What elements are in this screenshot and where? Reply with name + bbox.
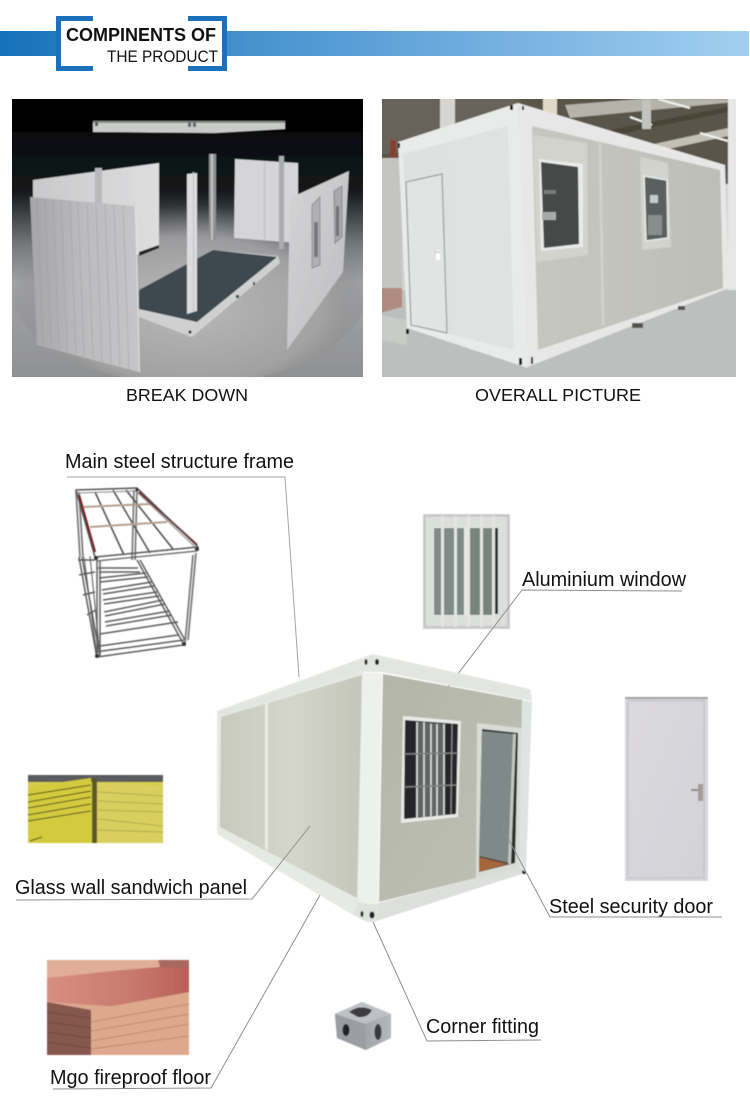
corner post (358, 673, 382, 905)
label: steel security door (502, 827, 722, 918)
icon: corner fitting (335, 1002, 391, 1050)
floor (139, 250, 280, 337)
label: mgo fireproof floor (50, 895, 320, 1089)
label: glass wall sandwich panel: Glass wall sandwich panel (15, 877, 247, 899)
label: mgo fireproof floor: Mgo fireproof floor (50, 1067, 211, 1089)
window 1 (533, 135, 588, 262)
label: main steel structure frame (65, 451, 299, 677)
barred window (401, 716, 461, 823)
label: glass wall sandwich panel (15, 826, 310, 900)
illustration: steel frame (76, 488, 199, 658)
photo: overall picture (380, 97, 738, 379)
right post (519, 700, 532, 872)
left face (217, 671, 364, 915)
floor (380, 288, 738, 379)
banner (0, 16, 749, 71)
image: yellow sandwich panel (28, 775, 163, 843)
label: corner fitting: Corner fitting (426, 1016, 539, 1038)
corner castings (360, 659, 526, 918)
container front (398, 103, 528, 368)
title box: THE PRODUCT (107, 48, 218, 66)
right wall (287, 171, 349, 350)
label: aluminium window (425, 569, 687, 717)
door (406, 174, 447, 333)
image: aluminium window (423, 514, 510, 629)
label: main steel structure frame: Main steel structure frame (65, 451, 294, 473)
label: steel security door: Steel security door (549, 896, 713, 918)
image: plywood floor (47, 960, 189, 1055)
label: aluminium window: Aluminium window (522, 569, 687, 591)
bottom rail (369, 866, 525, 922)
corner casting details (398, 105, 533, 365)
photo: break down (10, 97, 370, 385)
roof rail (217, 654, 532, 717)
centre column (187, 172, 197, 314)
caption: break down: BREAK DOWN (126, 385, 248, 405)
right face (379, 674, 523, 902)
factory background (382, 99, 736, 290)
top beam (93, 121, 285, 133)
front left panel (30, 197, 140, 372)
back right panel (234, 156, 298, 249)
title box: COMPINENTS OF (66, 24, 216, 45)
door opening (476, 723, 522, 878)
header gradient bar (0, 31, 749, 56)
title box (56, 16, 227, 71)
main house (217, 654, 532, 922)
back left wall (33, 163, 159, 256)
container side (518, 103, 729, 368)
caption: overall picture: OVERALL PICTURE (475, 385, 641, 405)
window 2 (640, 157, 671, 250)
door image (625, 697, 708, 881)
narrow column (209, 154, 216, 240)
label: corner fitting (373, 922, 541, 1041)
